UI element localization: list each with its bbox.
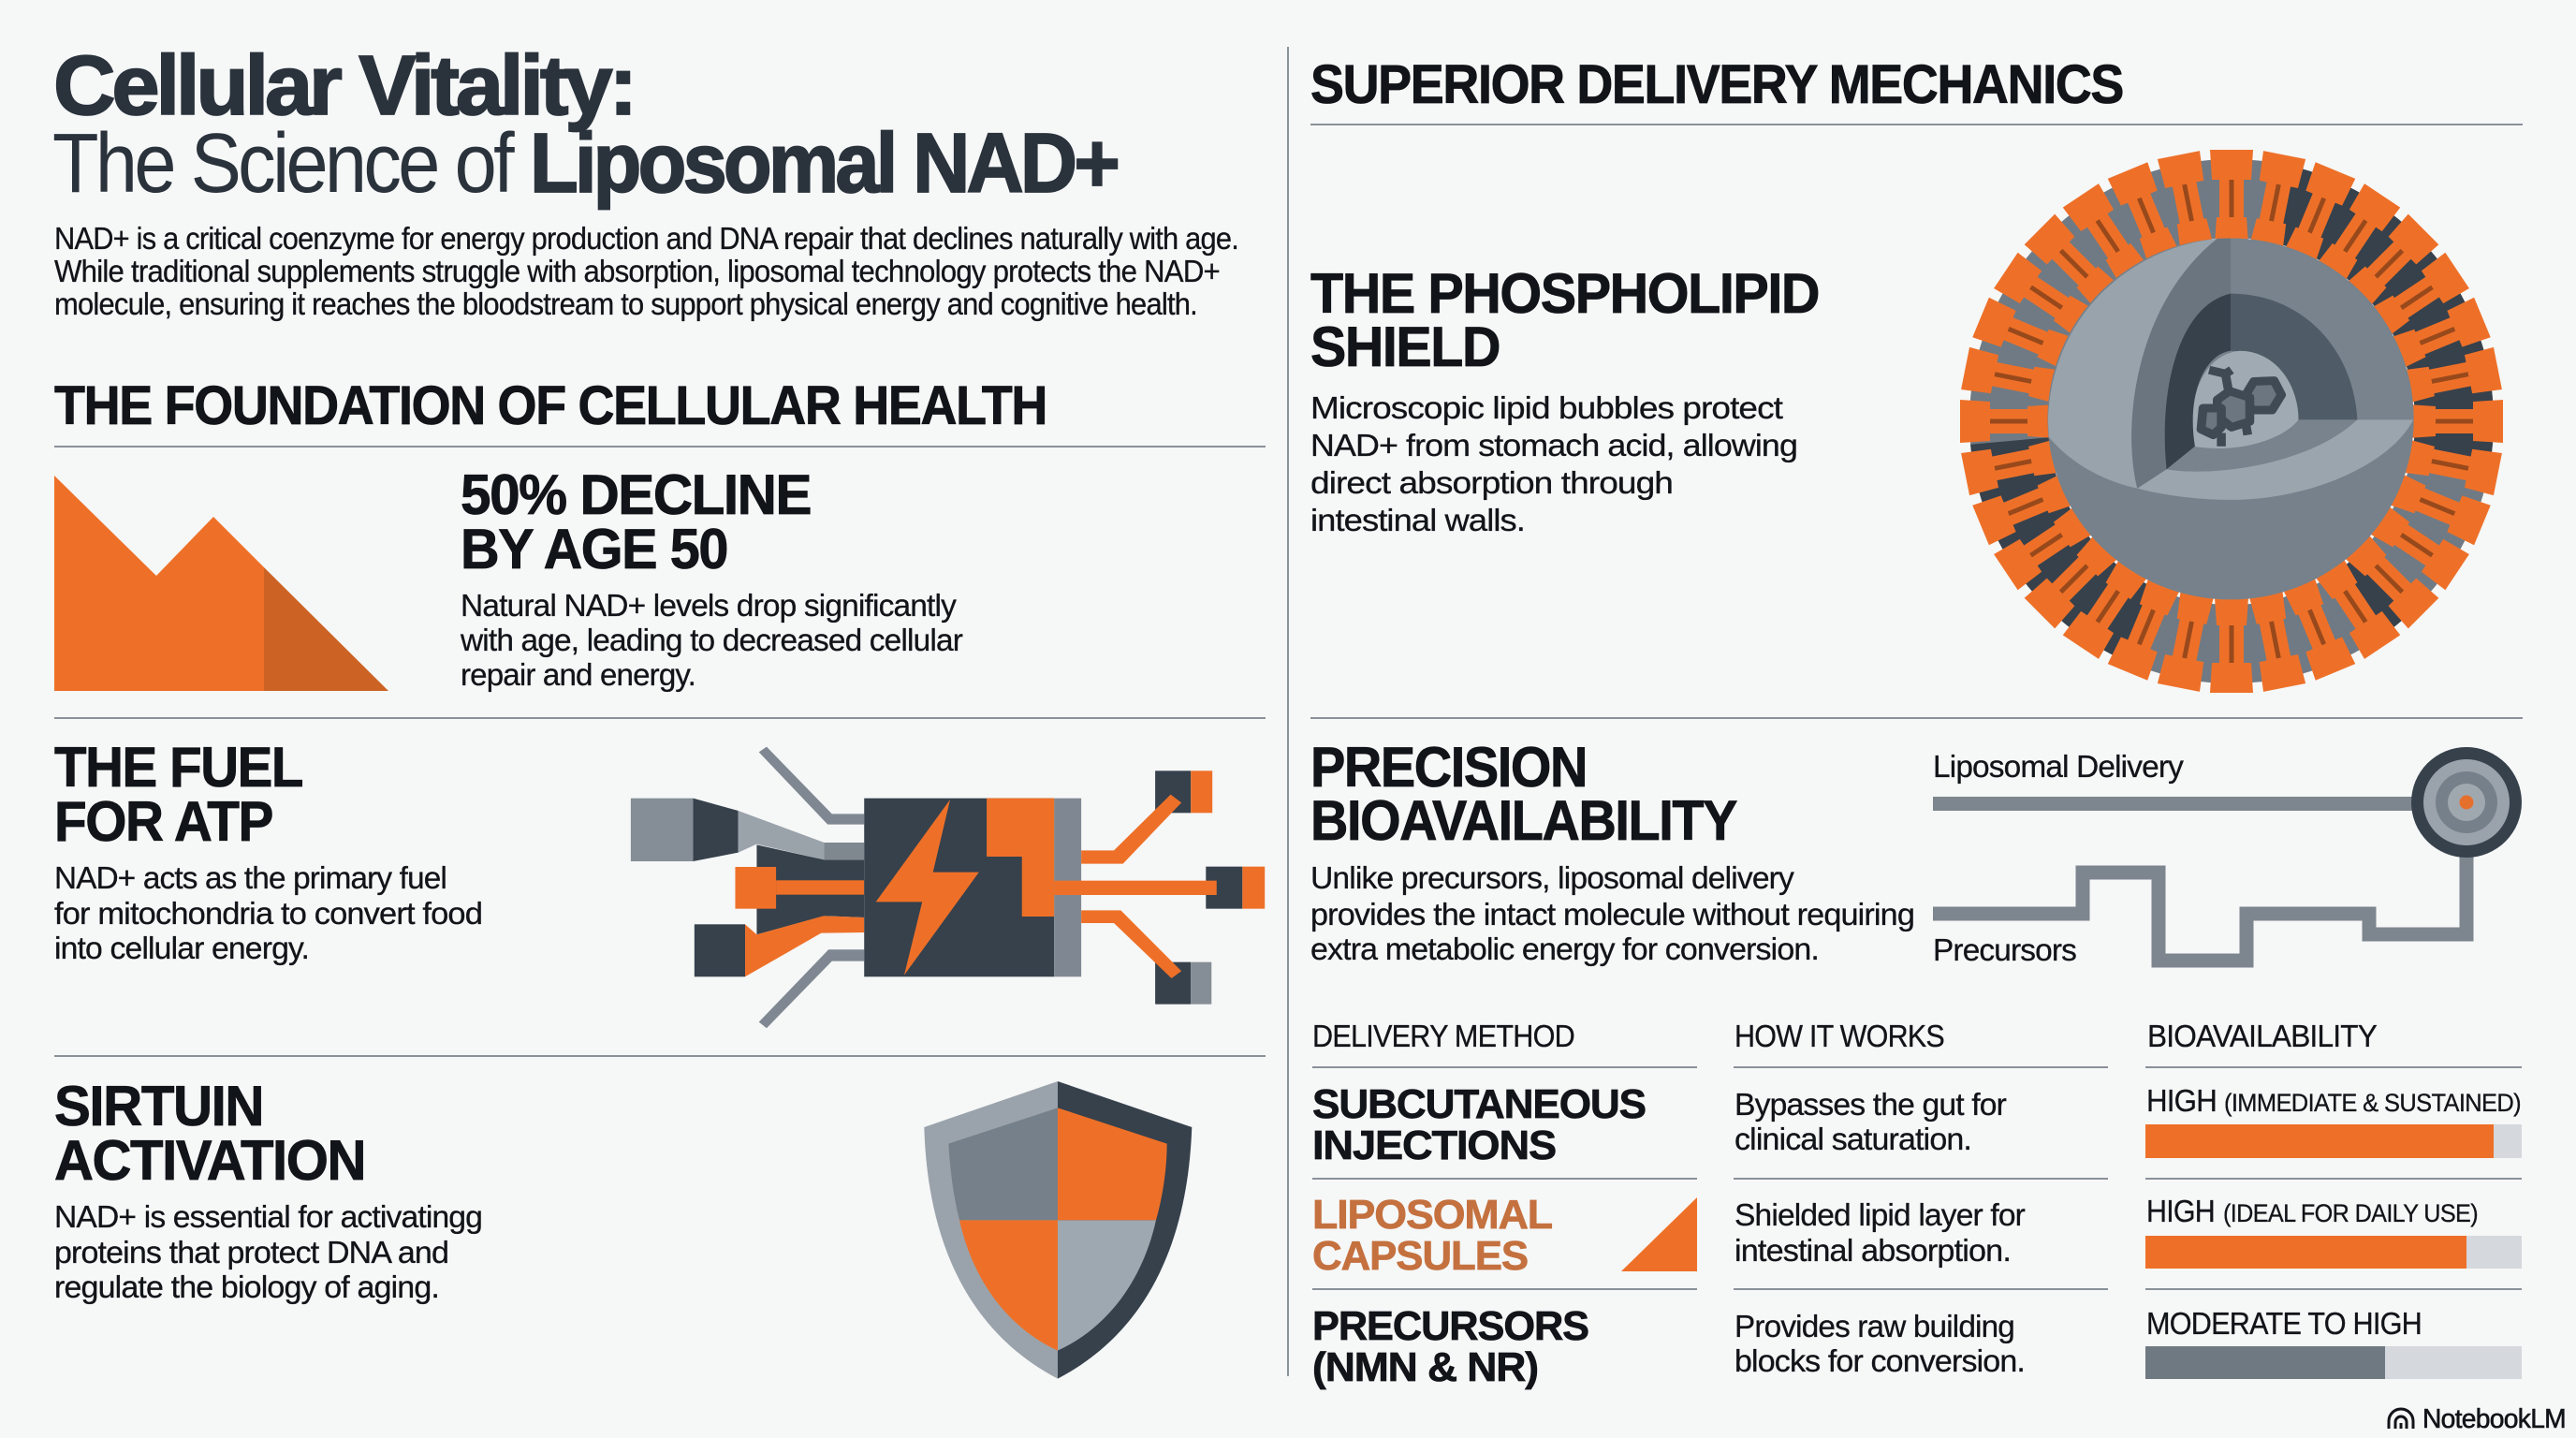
row: precursors <box>1312 1303 2522 1390</box>
title: Liposomal NAD+ <box>530 117 1117 211</box>
title <box>52 39 1117 211</box>
row: subcutaneous injections: clinical saturation. <box>1734 1122 1971 1156</box>
panel: precision bioavailability: provides the intact molecule without requiring <box>1310 897 1914 932</box>
panel: the fuel for ATP: NAD+ acts as the primary fuel <box>54 860 446 895</box>
title: Cellular Vitality: <box>53 39 634 133</box>
icon: decline chart <box>54 476 388 691</box>
panel: precision bioavailability: PRECISION <box>1310 736 1587 799</box>
panel: the phospholipid shield: NAD+ from stomach acid, allowing <box>1310 428 1797 462</box>
table header: BIOAVAILABILITY <box>2147 1019 2378 1053</box>
row: subcutaneous injections: SUBCUTANEOUS <box>1312 1081 1646 1127</box>
panel: sirtuin activation: ACTIVATION <box>54 1129 365 1192</box>
icon: liposome cross-section <box>1960 150 2503 693</box>
title: The Science of <box>52 117 516 211</box>
panel: sirtuin activation: regulate the biology of aging. <box>54 1269 439 1304</box>
row: subcutaneous injections: Bypasses the gut for <box>1734 1087 2007 1122</box>
panel: 50% decline: with age, leading to decreased cellular <box>460 623 963 657</box>
heading: the foundation of cellular health: THE FOUNDATION OF CELLULAR HEALTH <box>54 375 1046 436</box>
row: subcutaneous injections <box>1312 1081 2522 1168</box>
panel: 50% decline <box>460 463 963 692</box>
panel: the fuel for ATP: into cellular energy. <box>54 931 309 965</box>
panel: sirtuin activation <box>54 1075 482 1304</box>
row: liposomal capsules: HIGH <box>2146 1194 2215 1228</box>
row: liposomal capsules: intestinal absorption. <box>1734 1233 2011 1268</box>
panel: 50% decline: Natural NAD+ levels drop significantly <box>461 588 957 623</box>
chart: delivery pathways <box>1933 747 2522 967</box>
panel: the phospholipid shield: direct absorption through <box>1310 465 1673 500</box>
NAD+ molecule <box>2201 370 2281 447</box>
panel: the phospholipid shield: intestinal walls. <box>1310 503 1525 537</box>
panel: the phospholipid shield <box>1310 262 1819 537</box>
panel: the phospholipid shield: THE PHOSPHOLIPID <box>1310 262 1819 325</box>
row: precursors: (NMN & NR) <box>1312 1344 1538 1390</box>
row: liposomal capsules <box>1312 1192 2522 1279</box>
panel: the fuel for ATP: for mitochondria to convert food <box>54 896 482 931</box>
table: delivery method comparison <box>1312 1019 2522 1390</box>
panel: precision bioavailability: BIOAVAILABILITY <box>1310 789 1737 852</box>
panel: sirtuin activation: SIRTUIN <box>54 1075 263 1137</box>
row: precursors: MODERATE TO HIGH <box>2146 1306 2422 1341</box>
watermark: NotebookLM: NotebookLM <box>2422 1404 2566 1434</box>
intro paragraph: molecule, ensuring it reaches the bloodstream to support physical energy and cognitive health. <box>54 286 1197 321</box>
panel: the fuel for ATP <box>54 736 482 965</box>
row: liposomal capsules: LIPOSOMAL <box>1312 1192 1552 1238</box>
panel: sirtuin activation: NAD+ is essential for activatingg <box>54 1199 482 1234</box>
panel: the fuel for ATP: THE FUEL <box>54 736 302 799</box>
chart: delivery pathways: Precursors <box>1933 932 2076 967</box>
row: liposomal capsules: Shielded lipid layer for <box>1734 1197 2026 1232</box>
table header: DELIVERY METHOD <box>1312 1019 1574 1053</box>
heading: superior delivery mechanics: SUPERIOR DELIVERY MECHANICS <box>1310 54 2123 115</box>
row: precursors: blocks for conversion. <box>1734 1343 2025 1378</box>
row: precursors: Provides raw building <box>1734 1309 2014 1343</box>
intro paragraph: NAD+ is a critical coenzyme for energy production and DNA repair that declines naturally with age. <box>54 221 1238 256</box>
phospholipid molecules <box>1960 150 2503 693</box>
row: subcutaneous injections: HIGH <box>2146 1083 2217 1118</box>
panel: sirtuin activation: proteins that protect DNA and <box>54 1235 448 1269</box>
cutaway sphere <box>2047 238 2414 599</box>
icon: shield <box>924 1081 1192 1379</box>
panel: precision bioavailability: Unlike precursors, liposomal delivery <box>1310 860 1794 895</box>
panel: precision bioavailability: extra metabolic energy for conversion. <box>1310 932 1819 966</box>
lipid ring background <box>2009 198 2454 644</box>
chart: delivery pathways: Liposomal Delivery <box>1933 749 2184 784</box>
panel: 50% decline: repair and energy. <box>461 657 695 692</box>
panel: precision bioavailability <box>1310 736 1914 966</box>
icon: mitochondria energy circuit <box>631 747 1265 1028</box>
table header <box>1312 1019 2378 1053</box>
row: subcutaneous injections: INJECTIONS <box>1312 1123 1556 1168</box>
panel: the phospholipid shield: Microscopic lipid bubbles protect <box>1310 390 1783 425</box>
row: precursors: PRECURSORS <box>1312 1303 1588 1349</box>
panel: 50% decline: BY AGE 50 <box>461 518 727 580</box>
table header: HOW IT WORKS <box>1734 1019 1944 1053</box>
row: liposomal capsules: (IDEAL FOR DAILY USE) <box>2223 1199 2478 1227</box>
row: liposomal capsules: CAPSULES <box>1312 1233 1528 1279</box>
panel: 50% decline: 50% DECLINE <box>461 463 811 526</box>
intro paragraph <box>54 221 1238 321</box>
panel: the fuel for ATP: FOR ATP <box>54 790 272 853</box>
intro paragraph: While traditional supplements struggle with absorption, liposomal technology protects the NAD+ <box>54 254 1220 288</box>
panel: the phospholipid shield: SHIELD <box>1310 315 1500 378</box>
row: subcutaneous injections: (IMMEDIATE & SUSTAINED) <box>2224 1089 2521 1117</box>
